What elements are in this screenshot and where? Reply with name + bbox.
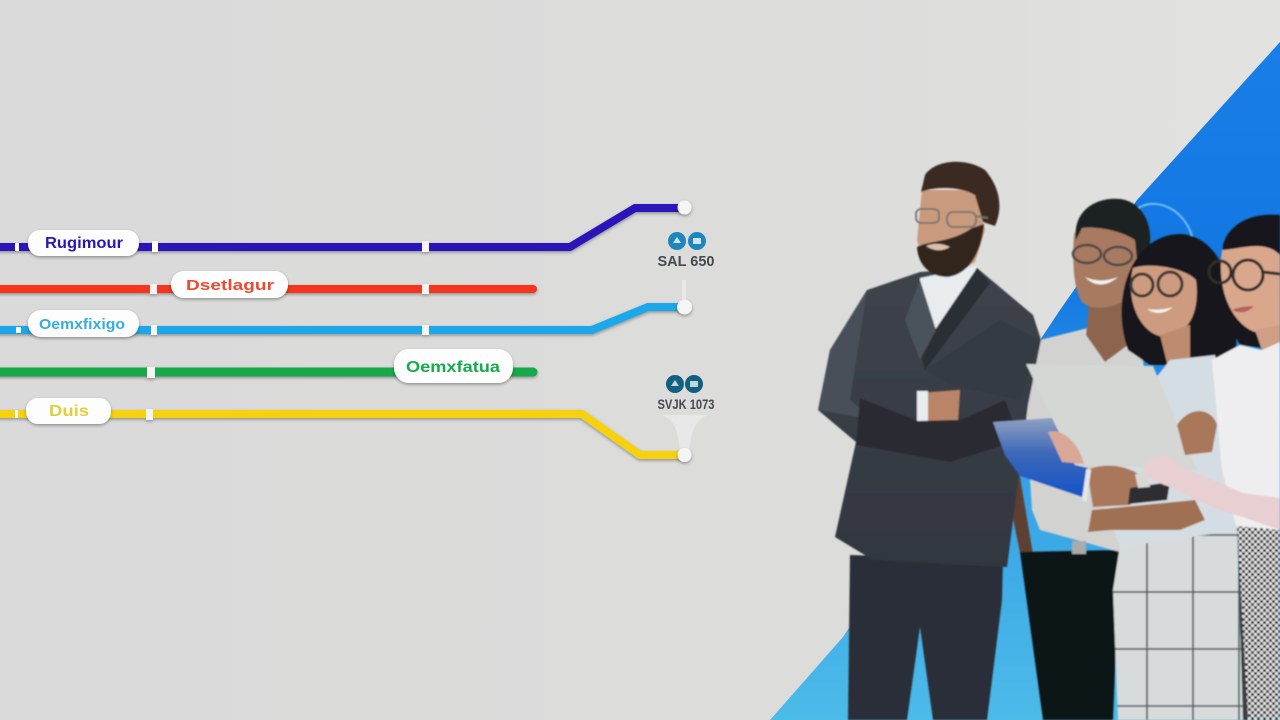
arms and hands (1048, 411, 1280, 532)
line: Duis track (0, 409, 684, 455)
track chart: five coloured lines (0, 208, 684, 455)
person: second man (1003, 199, 1150, 720)
label pill: Oemxfixigo: Oemxfixigo (39, 316, 125, 333)
blue folder (993, 418, 1088, 497)
team photo illustration (818, 162, 1280, 720)
icon pair and caption: SVJK 1073: SVJK 1073 (658, 396, 715, 412)
line: Dsetlagur track (0, 284, 533, 294)
thin circle arc behind team (1138, 204, 1192, 236)
icon pair and caption: SAL 650 (658, 232, 714, 270)
label pill: Rugimour (28, 230, 139, 256)
end connectors (662, 280, 708, 455)
line: Oemxfatua track (0, 367, 533, 378)
label pill: Rugimour: Rugimour (45, 235, 123, 252)
line: Rugimour track (0, 208, 684, 252)
label pill: Oemxfatua (394, 349, 513, 383)
label pill: Dsetlagur (171, 271, 288, 298)
person: first man (818, 162, 1041, 720)
end node markers (677, 200, 692, 462)
line: Oemxfixigo track (0, 307, 684, 335)
label pill: Oemxfatua: Oemxfatua (406, 359, 500, 376)
label pill: Dsetlagur: Dsetlagur (186, 277, 274, 294)
label pill: Duis: Duis (49, 403, 89, 420)
blue diagonal shape (770, 42, 1280, 720)
icon pair and caption: SAL 650: SAL 650 (658, 253, 714, 270)
person: fourth woman (1209, 215, 1280, 720)
person: third woman (1090, 234, 1243, 720)
icon pair and caption: SVJK 1073 (658, 375, 715, 412)
label pill: Duis (26, 398, 111, 424)
label pill: Oemxfixigo (28, 310, 139, 337)
laptop (1026, 364, 1197, 470)
